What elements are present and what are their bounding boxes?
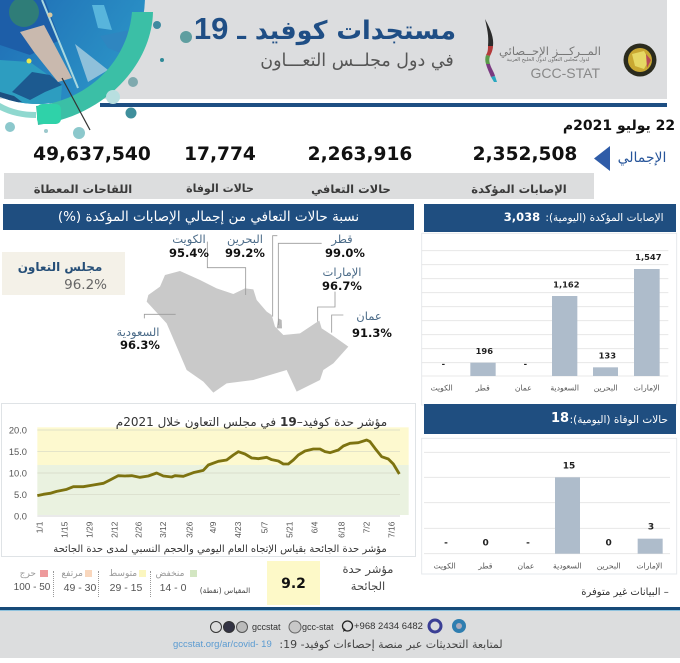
scale: critical — [14, 569, 50, 593]
recovered label: حالات التعافي — [311, 182, 391, 196]
bar chart: daily deaths: البحرين — [597, 561, 621, 570]
Oman name: عمان — [356, 309, 382, 323]
Saudi value: 96.3% — [120, 338, 160, 352]
label: Kuwait — [169, 232, 209, 260]
line chart: severity index: 7/16 — [386, 521, 396, 538]
kpi strip background — [4, 173, 594, 199]
bar chart: daily confirmed cases: - — [442, 359, 445, 369]
icon: GCC crest — [624, 44, 656, 76]
line chart: severity index: 3/12 — [158, 521, 168, 538]
footer band — [0, 610, 680, 658]
date: 22 يوليو 2021م — [563, 118, 675, 134]
line chart: severity index: 4/23 — [233, 521, 243, 538]
bar chart: daily confirmed cases: 1,547 — [635, 252, 662, 262]
bar chart: daily deaths: 15 — [563, 462, 575, 472]
low name: منخفض — [156, 569, 184, 579]
line chart: severity index: 4/9 — [208, 521, 218, 533]
logo arabic name: المــركـــز الإحــصائي — [499, 44, 601, 58]
bar chart: daily confirmed cases: البحرين — [594, 384, 618, 393]
severity value box — [267, 561, 320, 605]
line chart: severity index: 7/2 — [361, 521, 371, 533]
severity value box: 9.2 — [281, 576, 306, 592]
bar chart: daily deaths: 0 — [606, 538, 612, 548]
handle: gcc-stat: gcc-stat — [302, 622, 334, 632]
icon: snapchat — [288, 620, 302, 634]
footer link: gccstat.org/ar/covid- 19 — [173, 639, 272, 650]
scale: high — [61, 569, 96, 594]
label: Qatar — [325, 232, 365, 260]
total label: الإجمالي — [618, 150, 666, 166]
scale: low — [156, 569, 197, 594]
icon: ribbon — [485, 19, 497, 82]
bar chart: daily confirmed cases: 196 — [476, 346, 493, 356]
title: مستجدات كوفيد ـ 19 — [194, 11, 456, 46]
critical name: حرج — [20, 569, 36, 579]
Kuwait name: الكويت — [172, 232, 206, 246]
moderate name: متوسط — [109, 569, 137, 579]
daily deaths label: حالات الوفاة (اليومية): — [570, 414, 668, 426]
bar chart: daily confirmed cases — [421, 233, 677, 406]
GCC-STAT logo — [485, 19, 601, 82]
logo arabic tagline: لدول مجلس التعاون لدول الخليج العربية — [507, 57, 589, 63]
Qatar name: قطر — [331, 232, 353, 246]
daily confirmed value: 3,038 — [504, 210, 540, 224]
line chart: severity index: 5.0 — [14, 490, 27, 500]
high range: 49 - 30 — [64, 582, 96, 594]
line chart: severity index: 2/12 — [109, 521, 119, 538]
line chart: severity index: 1/15 — [60, 521, 70, 538]
Bahrain name: البحرين — [227, 232, 263, 246]
label: Oman — [352, 309, 392, 340]
severity scale legend — [14, 569, 250, 597]
kpi: vaccines — [33, 144, 151, 196]
panel: severity index chart frame — [1, 403, 416, 557]
Kuwait value: 95.4% — [169, 246, 209, 260]
line chart: severity index: 15.0 — [9, 447, 27, 457]
bar chart: daily deaths: قطر — [477, 561, 493, 570]
severity line two: الجائحة — [351, 579, 385, 593]
bar chart: daily deaths: السعودية — [553, 561, 582, 570]
low swatch — [190, 570, 197, 577]
GCC label: مجلس التعاون — [18, 260, 102, 274]
severity line one: مؤشر حدة — [343, 562, 393, 576]
header band — [0, 0, 667, 99]
line chart: severity index: 10.0 — [9, 468, 27, 478]
header image: circular collage — [0, 0, 164, 139]
kpi: deaths — [184, 144, 256, 195]
severity label — [343, 562, 393, 593]
footer rule — [0, 607, 680, 610]
subtitle: في دول مجلــس التعـــاون — [260, 51, 454, 71]
deaths label: حالات الوفاة — [186, 182, 254, 195]
vaccines value: 49,637,540 — [33, 144, 151, 165]
scale: moderate — [109, 569, 146, 594]
moderate range: 29 - 15 — [110, 582, 142, 594]
deaths value: 17,774 — [184, 144, 256, 165]
social icons — [210, 621, 248, 633]
label: Bahrain — [225, 232, 265, 260]
daily confirmed label: الإصابات المؤكدة (اليومية): — [545, 212, 664, 224]
Oman value: 91.3% — [352, 326, 392, 340]
bar chart: daily confirmed cases: قطر — [475, 384, 490, 393]
low range: 14 - 0 — [160, 582, 186, 594]
daily deaths value: 18 — [551, 411, 569, 426]
bar chart: daily confirmed cases: 1,162 — [553, 279, 580, 289]
Saudi name: السعودية — [117, 325, 159, 339]
line chart: severity index: 5/21 — [285, 521, 295, 538]
bubble near title — [180, 31, 192, 43]
bar chart: daily deaths — [421, 438, 677, 574]
label: UAE — [322, 265, 362, 293]
line chart: severity index: 5/7 — [260, 521, 270, 533]
panel: GCC recovery rate — [2, 252, 125, 295]
critical swatch — [40, 570, 48, 577]
line chart: severity index: 6/18 — [336, 521, 346, 538]
bar chart: daily deaths: الإمارات — [636, 561, 662, 570]
label: Saudi Arabia — [117, 325, 160, 352]
line chart: severity index — [9, 425, 409, 538]
panel heading: daily deaths — [424, 404, 676, 434]
confirmed value: 2,352,508 — [473, 144, 577, 165]
phone number: +968 2434 6482 — [354, 621, 423, 632]
line chart: severity index: 6/4 — [310, 521, 320, 533]
chart caption: مؤشر حدة الجائحة بقياس الإتجاه العام اليومي والحجم النسبي لمدى حدة الجائحة — [53, 544, 387, 555]
line chart: severity index: 2/26 — [133, 521, 143, 538]
arrow: total pointer — [594, 146, 610, 171]
panel heading: daily confirmed cases — [424, 204, 676, 232]
recovered value: 2,263,916 — [308, 144, 412, 165]
bar chart: daily deaths: عمان — [518, 561, 534, 570]
bar chart: daily deaths: 3 — [648, 522, 654, 532]
header rule — [100, 103, 667, 107]
kpi: recovered — [308, 144, 412, 196]
confirmed label: الإصابات المؤكدة — [471, 182, 567, 196]
line chart: severity index: 1/1 — [35, 521, 45, 533]
UAE value: 96.7% — [322, 279, 362, 293]
map of GCC with leader lines — [144, 235, 348, 392]
note: data unavailable: – البيانات غير متوفرة — [581, 587, 669, 598]
line chart: severity index: 0.0 — [14, 511, 27, 521]
bar chart: daily confirmed cases: عمان — [515, 384, 532, 393]
Qatar value: 99.0% — [325, 246, 365, 260]
Bahrain value: 99.2% — [225, 246, 265, 260]
bar chart: daily deaths: 0 — [483, 538, 489, 548]
logo latin name: GCC-STAT — [531, 65, 600, 81]
line chart: severity index: 1/29 — [85, 521, 95, 538]
vaccines label: اللقاحات المعطاة — [34, 182, 132, 196]
high name: مرتفع — [61, 569, 83, 579]
kpi: confirmed — [471, 144, 577, 196]
scale title: المقياس (نقطة) — [200, 586, 250, 595]
bar chart: daily deaths: - — [444, 538, 448, 548]
chart title: مؤشر حدة كوفيد–19 في مجلس التعاون خلال 2021م — [116, 415, 387, 429]
critical range: 100 - 50 — [14, 582, 50, 593]
bar chart: daily confirmed cases: السعودية — [550, 384, 579, 393]
handle: gccstat: gccstat — [252, 622, 281, 632]
icon: whatsapp — [342, 620, 354, 632]
bar chart: daily deaths: الكويت — [434, 561, 456, 570]
UAE name: الإمارات — [322, 265, 362, 279]
bar chart: daily deaths: - — [526, 538, 530, 548]
line chart: severity index: 3/26 — [185, 521, 195, 538]
footer text: لمتابعة التحديثات عبر منصة إحصاءات كوفيد- 19: — [279, 638, 503, 651]
bar chart: daily confirmed cases: 133 — [599, 350, 616, 360]
bar chart: daily confirmed cases: الكويت — [431, 384, 453, 393]
panel heading: recovery rate — [3, 204, 414, 230]
GCC value: 96.2% — [64, 277, 107, 293]
moderate swatch — [139, 570, 146, 577]
panel heading: recovery rate: نسبة حالات التعافي من إجمالي الإصابات المؤكدة (%) — [58, 209, 359, 225]
bar chart: daily confirmed cases: الإمارات — [634, 384, 660, 393]
line chart: severity index: 20.0 — [9, 425, 27, 435]
bar chart: daily confirmed cases: - — [524, 359, 527, 369]
icon: GCC-STAT mark — [428, 618, 466, 634]
high swatch — [85, 570, 92, 577]
